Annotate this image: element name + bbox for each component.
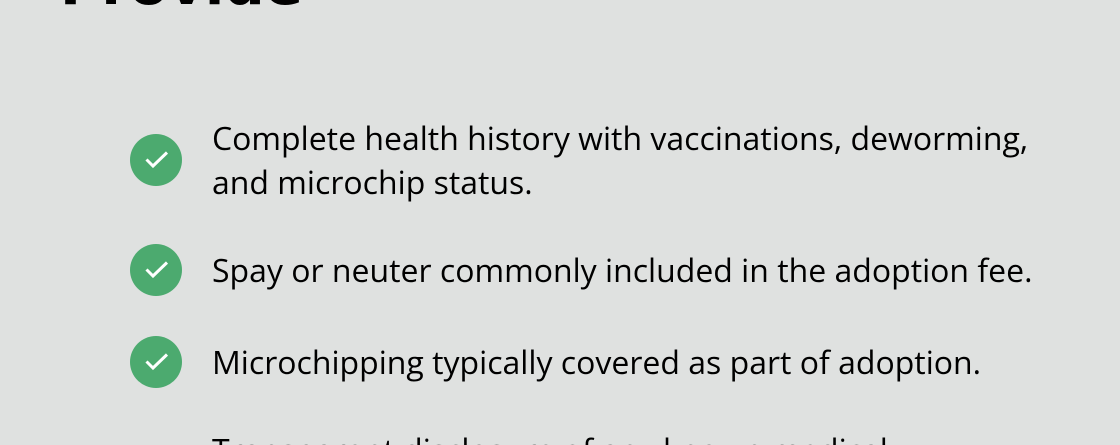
icon: check 2: [130, 244, 182, 296]
text: health history: Complete health history with vaccinations, deworming,: [212, 117, 1028, 160]
text: microchipping: Microchipping typically covered as part of adoption.: [212, 341, 981, 384]
text: spay or neuter: Spay or neuter commonly included in the adoption fee.: [212, 249, 1032, 292]
text: health history: [212, 117, 1028, 204]
icon: check 3: [130, 336, 182, 388]
text: health history: and microchip status.: [212, 161, 533, 204]
icon: check 1: [130, 134, 182, 186]
